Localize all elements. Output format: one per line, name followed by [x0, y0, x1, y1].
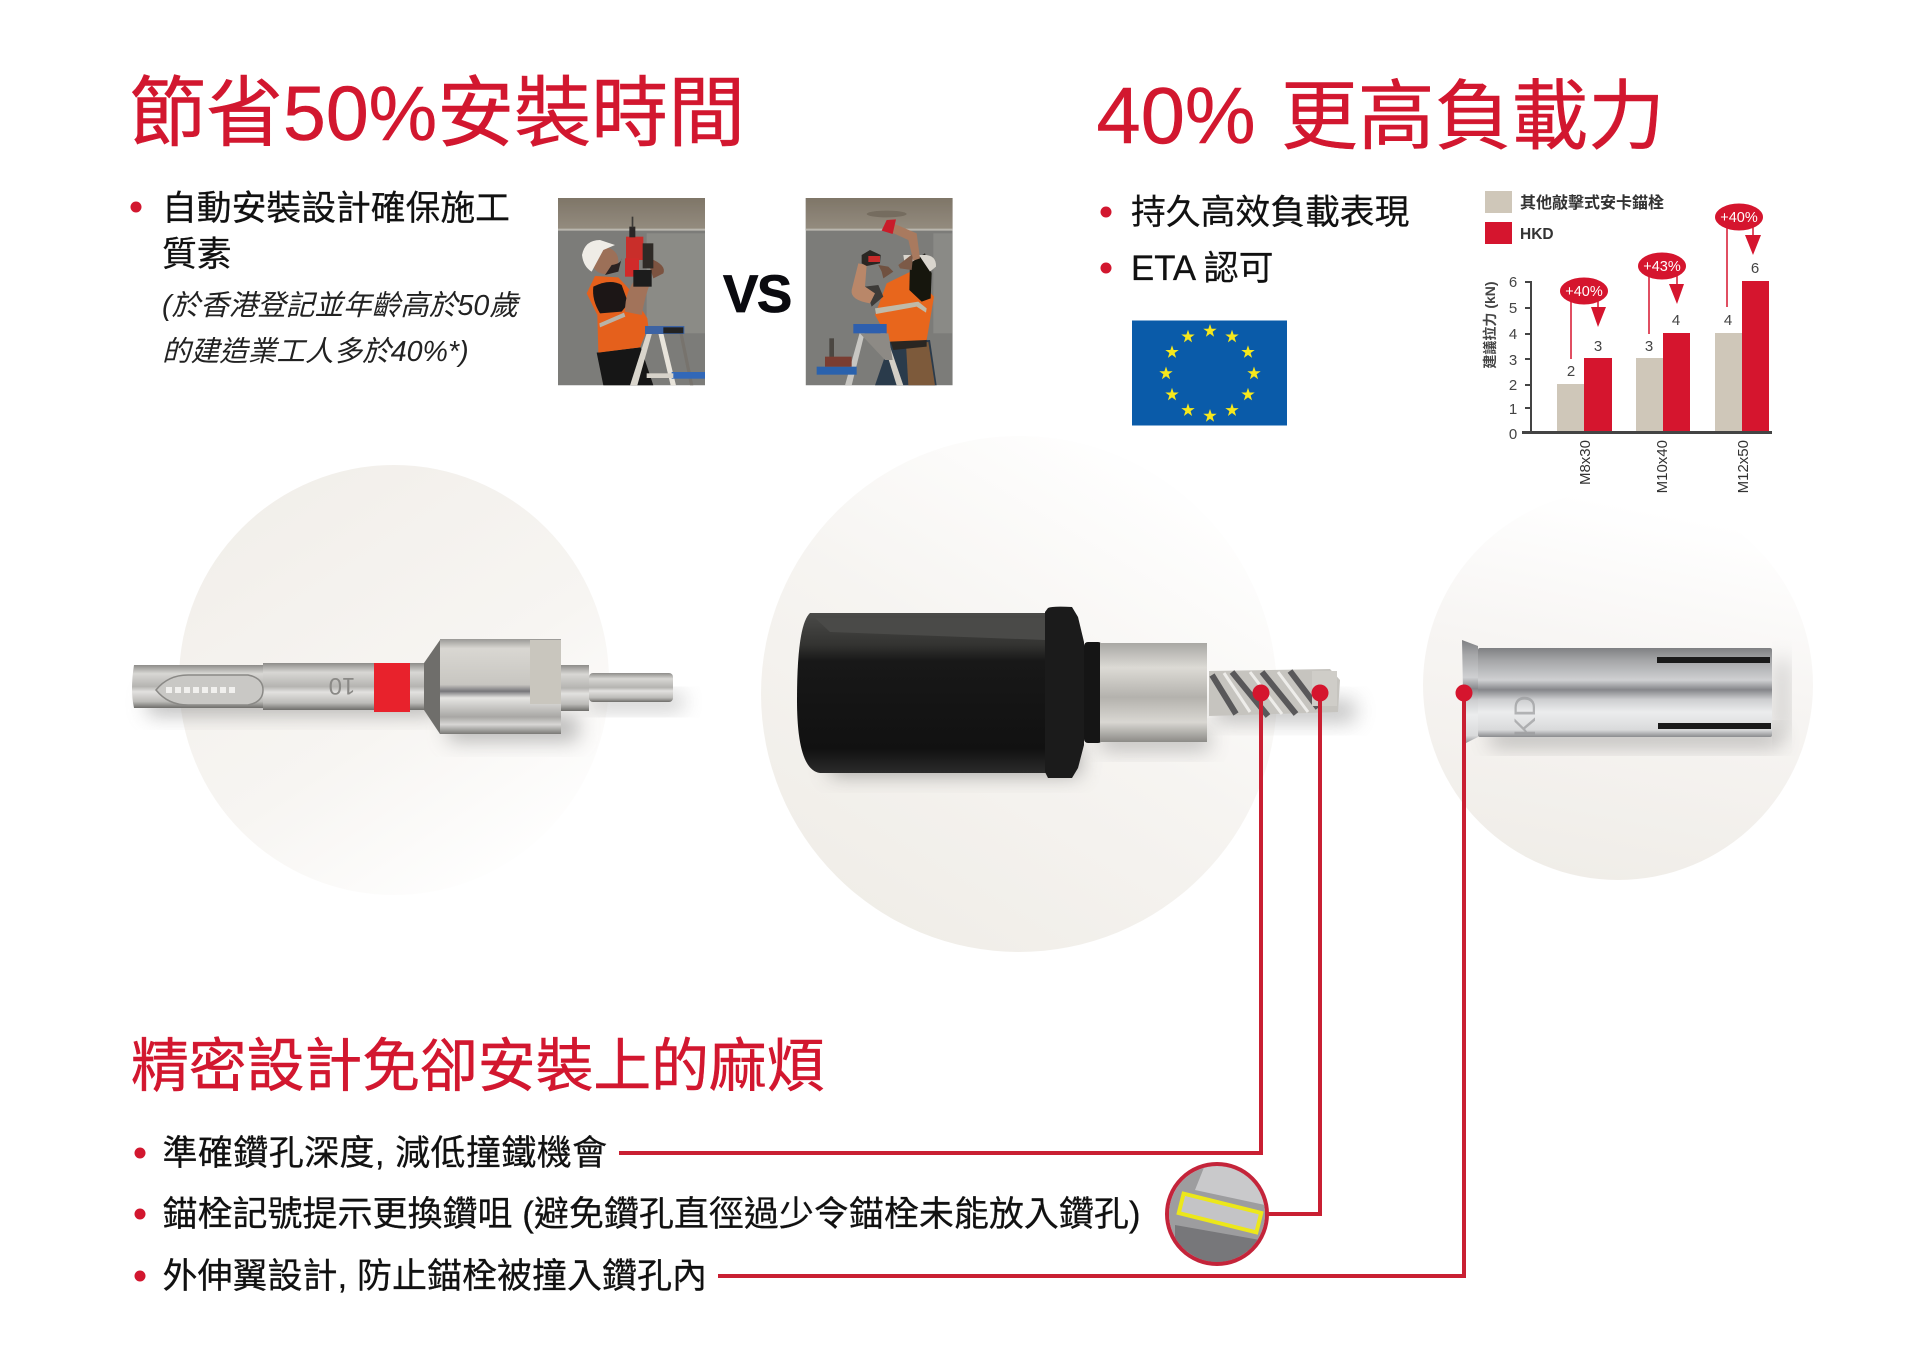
product: drop-in anchor — [1462, 640, 1789, 746]
x labels: M8x30 — [1577, 440, 1594, 485]
bullet text: 外伸翼設計, 防止錨栓被撞入鑽孔內 — [162, 1257, 707, 1296]
connector: anchor marking — [1267, 684, 1328, 1214]
value labels: 2 — [1567, 363, 1575, 380]
y axis label: 建議拉力 (kN) — [1482, 281, 1498, 369]
x labels: M12x50 — [1735, 440, 1752, 493]
legend: 其他敲擊式安卡錨栓 — [1520, 193, 1664, 212]
bullet dot — [134, 1148, 146, 1158]
background circle: drill tool — [761, 436, 1277, 952]
axis numbers: 0 — [1509, 426, 1517, 443]
bullet dot — [1100, 262, 1112, 274]
bullet dot — [134, 1208, 146, 1220]
axis numbers: 4 — [1509, 326, 1517, 343]
bullet list: bottom — [134, 1134, 1141, 1296]
photo: worker with rotary hammer — [558, 198, 705, 385]
bullet dot — [134, 1270, 146, 1282]
note line two: 的建造業工人多於40%*) — [162, 336, 469, 368]
bar chart — [1482, 191, 1772, 493]
value labels: 3 — [1594, 338, 1602, 355]
axis numbers: 6 — [1509, 274, 1517, 291]
bullet text: 持久高效負載表現 — [1131, 193, 1409, 232]
value labels: 4 — [1724, 312, 1732, 329]
heading: 40% higher load: 40% — [1096, 71, 1256, 160]
note line one: (於香港登記並年齡高於50歲 — [162, 290, 521, 322]
bullet text: 錨栓記號提示更換鑽咀 (避免鑽孔直徑過少令錨栓未能放入鑽孔) — [162, 1195, 1141, 1234]
bullet dot — [1100, 206, 1112, 218]
background circle: drill bit — [179, 465, 609, 895]
bullet list: right top — [1100, 193, 1409, 288]
axis numbers: 2 — [1509, 377, 1517, 394]
callout +43%: +43% — [1643, 259, 1681, 275]
product: drop-in anchor: KD — [1509, 695, 1542, 737]
background circle: anchor — [1423, 490, 1813, 880]
callout +40% — [1560, 278, 1608, 359]
value labels: 6 — [1751, 260, 1759, 277]
callout +40%: +40% — [1565, 284, 1603, 300]
bullet dot — [130, 202, 142, 212]
heading: 40% higher load: 更高負載力 — [1281, 74, 1665, 160]
value labels — [1567, 260, 1759, 380]
product: stop drill bit — [132, 639, 683, 741]
bars — [1557, 281, 1769, 432]
product: stop drill bit: 10 — [329, 672, 355, 699]
bullet list: left top — [130, 189, 521, 368]
product: drill with black collar — [797, 607, 1355, 778]
axis numbers: 5 — [1509, 300, 1517, 317]
icon: inset marking detail — [1165, 1160, 1270, 1270]
photo: worker with hand tools — [806, 198, 953, 385]
x labels: M10x40 — [1654, 440, 1671, 493]
callout +43% — [1638, 252, 1686, 334]
heading: precision design: 精密設計免卻安裝上的麻煩 — [131, 1035, 825, 1099]
bullet text: 準確鑽孔深度, 減低撞鐵機會 — [162, 1134, 608, 1173]
bullet text continued: 質素 — [162, 235, 232, 274]
callout +40% large: +40% — [1720, 210, 1758, 226]
x labels — [1577, 440, 1752, 493]
icon: EU flag — [1132, 320, 1287, 426]
callout +40% large — [1715, 204, 1763, 307]
connector: flange — [718, 684, 1472, 1276]
value labels: 3 — [1645, 338, 1653, 355]
connector: drill depth — [619, 684, 1270, 1153]
axes — [1522, 281, 1772, 432]
legend: HKD — [1520, 226, 1554, 243]
bullet text: 自動安裝設計確保施工 — [162, 189, 510, 228]
value labels: 4 — [1672, 312, 1680, 329]
axis numbers: 1 — [1509, 401, 1517, 418]
heading: save 50% install time: 節省50%安裝時間 — [129, 71, 745, 157]
text: VS: VS — [723, 265, 791, 324]
axis numbers: 3 — [1509, 352, 1517, 369]
legend — [1485, 191, 1664, 244]
bullet text: ETA 認可 — [1131, 249, 1273, 288]
axis numbers — [1509, 274, 1517, 443]
